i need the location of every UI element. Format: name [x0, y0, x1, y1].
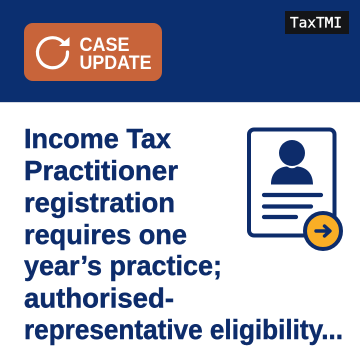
title: registration — [24, 187, 175, 218]
text lines — [264, 195, 321, 217]
logo: TaxTMI — [285, 11, 349, 34]
logo: TaxTMI: TaxTMI — [290, 16, 342, 32]
person shoulders — [271, 166, 313, 184]
title: Income Tax — [24, 123, 172, 154]
icon: refresh arrow — [38, 37, 70, 68]
badge: case update — [24, 23, 162, 81]
title: representative eligibility... — [24, 314, 343, 345]
title: requires one — [24, 219, 187, 250]
badge label: CASE — [80, 35, 130, 56]
title — [24, 123, 343, 345]
person head — [279, 140, 305, 166]
header band — [0, 0, 360, 103]
arrow badge — [305, 213, 341, 249]
title: Practitioner — [24, 155, 178, 186]
document outline — [249, 130, 334, 236]
badge label — [80, 35, 152, 74]
title: authorised- — [24, 282, 174, 314]
badge label: UPDATE — [80, 53, 152, 74]
icon: profile document — [249, 130, 341, 249]
title: year’s practice; — [24, 250, 222, 281]
